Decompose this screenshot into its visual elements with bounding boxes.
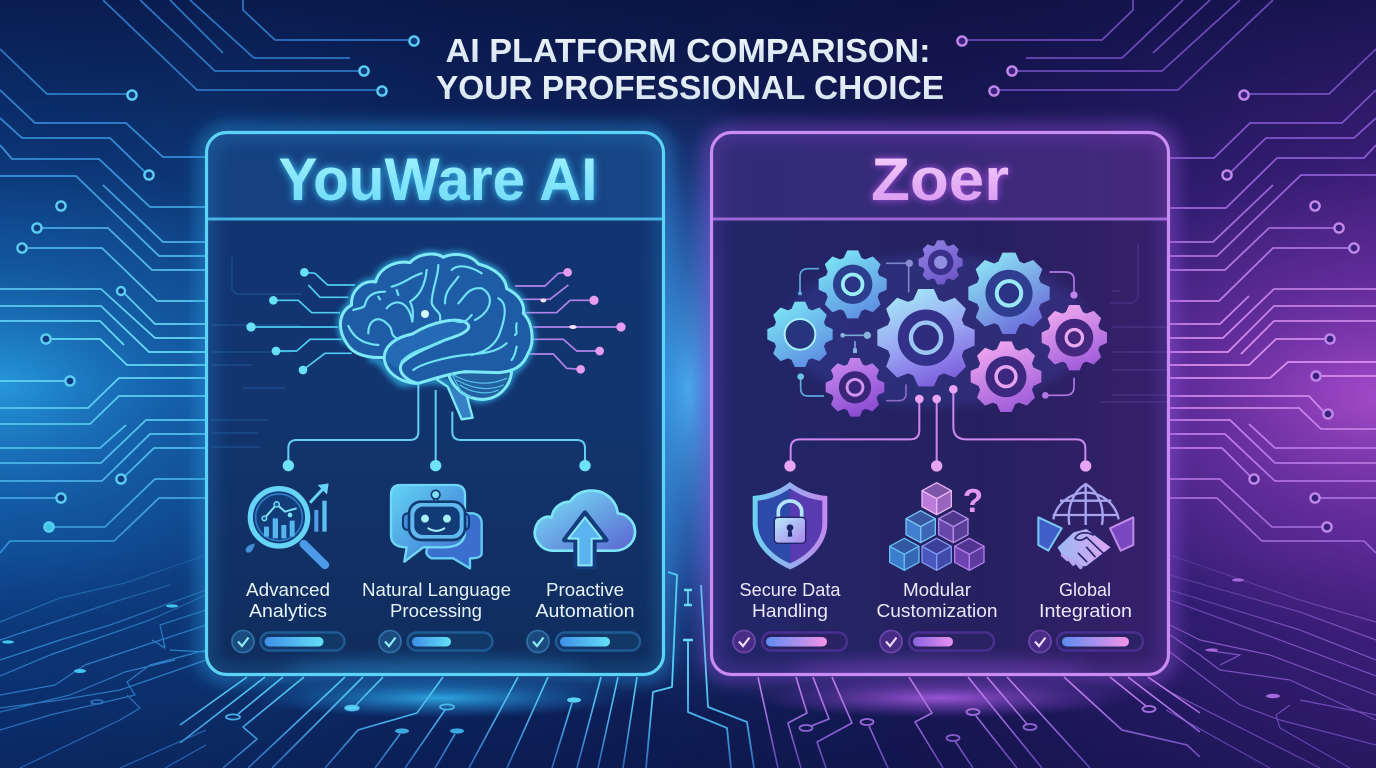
inner bottom glow	[794, 651, 1086, 673]
rating: Modular Customization	[880, 630, 994, 652]
icon: gears cluster	[767, 240, 1107, 472]
labels Zoer: Customization	[876, 601, 998, 621]
gears connector lines	[784, 385, 1091, 472]
gear 8	[826, 358, 884, 417]
rating: Advanced Analytics	[232, 630, 344, 652]
circuit floor left	[0, 555, 206, 768]
heading Zoer: Zoer	[871, 146, 1009, 213]
brain signal lines	[246, 268, 626, 374]
faint panel circuitry left	[210, 257, 302, 447]
circuit under right panel	[758, 677, 1200, 768]
icon: security shield	[753, 482, 827, 569]
icon: brain	[246, 254, 626, 471]
title: AI PLATFORM COMPARISON:	[446, 32, 930, 69]
rating: Natural Language Processing	[379, 630, 492, 652]
icon: modular cubes	[890, 483, 984, 570]
heading Zoer: Zoer	[871, 146, 1009, 213]
labels Zoer: Secure Data	[740, 580, 841, 600]
heading YouWare AI: YouWare AI	[278, 146, 598, 213]
brain folds	[348, 265, 517, 397]
gear 3	[968, 253, 1050, 334]
circuit under left panel	[180, 677, 637, 768]
panel: YouWare AI	[205, 131, 665, 686]
labels Zoer	[740, 580, 1132, 621]
icon: robot chat	[391, 485, 482, 568]
gear 6	[1042, 305, 1107, 370]
gear 5 main	[877, 289, 975, 386]
bottom glow blue	[250, 678, 630, 718]
brain glow	[340, 254, 532, 400]
labels Zoer: Global	[1059, 580, 1111, 600]
icon: question mark: ?	[963, 482, 983, 519]
header divider	[712, 218, 1168, 220]
brain outline	[340, 254, 532, 419]
labels Zoer: Handling	[752, 601, 828, 621]
icon: analytics magnifier	[246, 483, 329, 565]
header band YouWare AI	[206, 132, 664, 219]
gear 7	[971, 341, 1041, 412]
labels YouWare AI: Advanced	[246, 580, 330, 600]
title: YOUR PROFESSIONAL CHOICE	[436, 69, 944, 106]
circuit traces left	[0, 0, 419, 553]
icon: cloud upload	[535, 491, 635, 567]
brain connector lines	[283, 383, 591, 471]
gear 2	[919, 240, 963, 284]
icon: global handshake	[1038, 484, 1133, 567]
rating: Global Integration	[1029, 630, 1143, 652]
labels YouWare AI: Automation	[536, 601, 634, 621]
header divider	[207, 218, 663, 220]
circuit traces right	[957, 0, 1376, 553]
labels YouWare AI: Proactive	[546, 580, 624, 600]
faint panel circuitry right	[1100, 243, 1168, 402]
circuit floor right	[1166, 555, 1376, 768]
panel: Zoer	[710, 131, 1170, 686]
labels YouWare AI	[246, 580, 634, 621]
labels YouWare AI: Analytics	[249, 601, 327, 621]
header band Zoer	[712, 132, 1168, 219]
gear connectors	[797, 260, 1078, 401]
labels YouWare AI: Processing	[390, 601, 482, 621]
inner bottom glow	[288, 650, 582, 673]
labels YouWare AI: Natural Language	[362, 580, 511, 600]
rating: Proactive Automation	[527, 630, 640, 652]
circuit center channel	[646, 572, 754, 768]
gear 1	[819, 250, 887, 318]
gear 4	[767, 302, 833, 367]
labels Zoer: Modular	[903, 580, 971, 600]
labels Zoer: Integration	[1039, 601, 1132, 621]
rating: Secure Data Handling	[733, 630, 847, 652]
bottom glow purple	[750, 678, 1130, 718]
title	[436, 32, 944, 106]
brain highlight	[421, 310, 429, 318]
heading YouWare AI: YouWare AI	[278, 146, 598, 213]
